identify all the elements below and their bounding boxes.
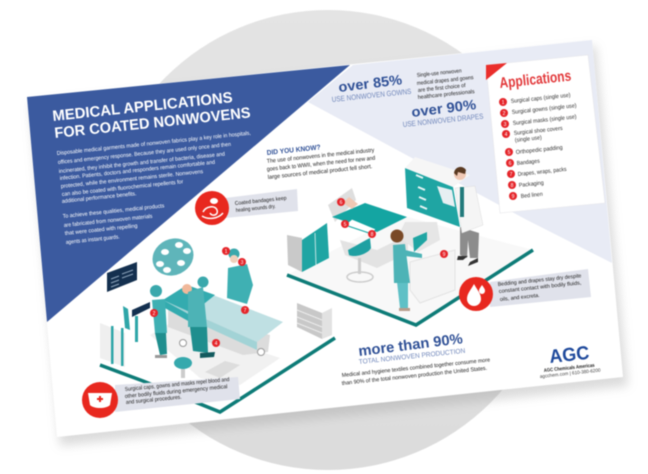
surgeon right [227, 248, 253, 304]
surgical lamp [146, 232, 200, 282]
stat: over 85% gowns: over 85% [337, 71, 403, 95]
AGC logo and contact: AGC Chemicals Americas [544, 363, 595, 374]
applications list: Bandages [517, 159, 540, 167]
applications list: Drapes, wraps, packs [518, 167, 567, 178]
applications list: 7 [510, 172, 513, 178]
doctor [454, 167, 483, 266]
did you know: DID YOU KNOW? [266, 144, 321, 157]
stat: over 85% gowns [331, 71, 412, 104]
number badges: 3 [241, 260, 244, 266]
callout: bandages: healing wounds dry. [236, 204, 276, 214]
platform edge [100, 338, 335, 412]
ward floor [287, 215, 533, 325]
did you know [266, 144, 376, 181]
AGC logo and contact [540, 343, 601, 380]
cart and monitor [398, 222, 455, 303]
applications list: Surgical masks (single use) [513, 114, 577, 127]
wall cabinet [405, 157, 470, 227]
applications list [499, 93, 577, 200]
single-use text: healthcare professionals [418, 89, 475, 101]
AGC logo and contact: AGC [548, 343, 591, 368]
applications list: Surgical shoe covers [514, 126, 563, 137]
bed [328, 188, 408, 268]
applications list: (single use) [515, 135, 542, 144]
number badges: 5 [344, 222, 347, 228]
applications list: 2 [503, 111, 506, 117]
intro text: incinerated, they inhibit the growth and transfer of bacteria, disease and [59, 152, 225, 175]
wall monitor [107, 262, 137, 292]
applications card [486, 55, 605, 213]
floor edge [287, 250, 533, 325]
intro text: To achieve these qualities, medical products [63, 203, 165, 220]
applications list: Bed linen [521, 192, 543, 200]
callout: bedding: Bedding and drapes stay dry despite [498, 273, 582, 288]
applications list: 8 [511, 183, 514, 189]
intro text: agents as instant guards. [66, 234, 120, 246]
teal wardrobe [287, 223, 329, 272]
applications list: 5 [508, 150, 511, 156]
intro text [57, 131, 252, 246]
sheet shadow [30, 46, 628, 446]
did you know: The use of nonwovens in the medical industry [267, 148, 375, 165]
single-use text: Single-use nonwoven [417, 68, 462, 79]
single-use text: are the first choice of [418, 83, 466, 94]
applications list: Surgical gowns (single use) [512, 103, 577, 116]
callout: bedding [459, 269, 591, 311]
blue title panel [27, 65, 350, 322]
applications list: 4 [505, 132, 508, 138]
stat: more than 90% [342, 331, 490, 387]
title: FOR COATED NONWOVENS [54, 104, 251, 142]
stat: more than 90%: more than 90% [358, 331, 464, 360]
equipment monitor [123, 302, 150, 342]
applications list: Packaging [519, 180, 544, 189]
intro text: can also be coated with fluorochemical repellents for [62, 179, 184, 198]
stat: more than 90%: TOTAL NONWOVEN PRODUCTION [358, 348, 466, 366]
callout: bandages: Coated bandages keep [235, 196, 287, 207]
number badges: 8 [371, 232, 374, 238]
intro text: offices and emergency response. Because they are used only once and then [58, 142, 231, 166]
title: MEDICAL APPLICATIONS [52, 89, 233, 125]
stat: over 90% drapes: USE NONWOVEN DRAPES [402, 112, 484, 129]
surgeon left [150, 285, 167, 358]
number badges: 1 [225, 249, 228, 255]
did you know: large sources of medical product fell short. [268, 164, 373, 181]
side cabinet [100, 323, 125, 367]
title [52, 89, 251, 142]
paper sheet [27, 40, 623, 437]
number badges [150, 247, 249, 347]
callout: masks [82, 377, 240, 418]
intro text: are fabricated from nonwoven materials [64, 214, 153, 229]
single-use text [417, 68, 475, 101]
grey background circle [98, 10, 558, 470]
callout: bandages [195, 189, 298, 225]
operating room illustration [100, 232, 335, 412]
nurse [390, 230, 422, 311]
applications list: 9 [512, 194, 515, 200]
operating table [163, 284, 283, 356]
floor shadow [150, 322, 280, 385]
callout: masks: Surgical caps, gowns and masks repel blood and [125, 377, 230, 393]
stat: more than 90%: than 90% of the total nonwoven production the United States. [342, 366, 488, 387]
applications heading: Applications [499, 68, 572, 92]
intro text: protected, while the environment remains sterile. Nonwovens [61, 169, 204, 190]
callout: masks: and surgical procedures. [126, 395, 182, 406]
applications list: Orthopedic padding [516, 145, 563, 156]
bedside chair [347, 238, 373, 282]
shelf unit [297, 303, 332, 339]
did you know: goes back to WWII, when the need for new and [267, 156, 376, 173]
patient ward illustration [287, 157, 533, 325]
intro text: additional performance benefits. [62, 191, 137, 205]
applications list: Surgical caps (single use) [511, 93, 571, 105]
intro text: that were coated with repelling [65, 223, 138, 237]
stat: over 85% gowns: USE NONWOVEN GOWNS [331, 87, 412, 104]
applications list: 1 [502, 100, 505, 106]
stat: over 90% drapes: over 90% [410, 96, 477, 120]
surgeon center [188, 276, 215, 358]
number badges: 2 [153, 311, 156, 317]
number badges: 4 [215, 341, 218, 347]
red corner [486, 63, 507, 80]
stat: over 90% drapes [402, 96, 484, 129]
applications list: 6 [509, 161, 512, 167]
number badges: 9 [443, 252, 446, 258]
stool [174, 357, 192, 378]
lavender background wedge [308, 40, 612, 263]
number badges: 6 [340, 200, 343, 206]
callout: bedding: constant contact with bodily fluids, [499, 280, 582, 295]
callout: masks: other bodily fluids during emergency medical [125, 384, 228, 400]
AGC logo and contact: agcchem.com | 610-380-6200 [540, 368, 601, 380]
number badges: 7 [244, 308, 247, 314]
number badges [337, 198, 448, 258]
stat: more than 90%: Medical and hygiene textiles combined together consume more [342, 357, 490, 379]
callout: bedding: oils, and excreta. [500, 293, 540, 303]
single-use text: medical drapes and gowns [417, 75, 474, 87]
instrument tray [205, 361, 240, 378]
intro text: infection. Patients, doctors and responders remain comfortable and [60, 160, 215, 182]
applications list: 3 [504, 122, 507, 128]
intro text: Disposable medical garments made of nonwoven fabrics play a key role in hospitals, [57, 131, 252, 157]
